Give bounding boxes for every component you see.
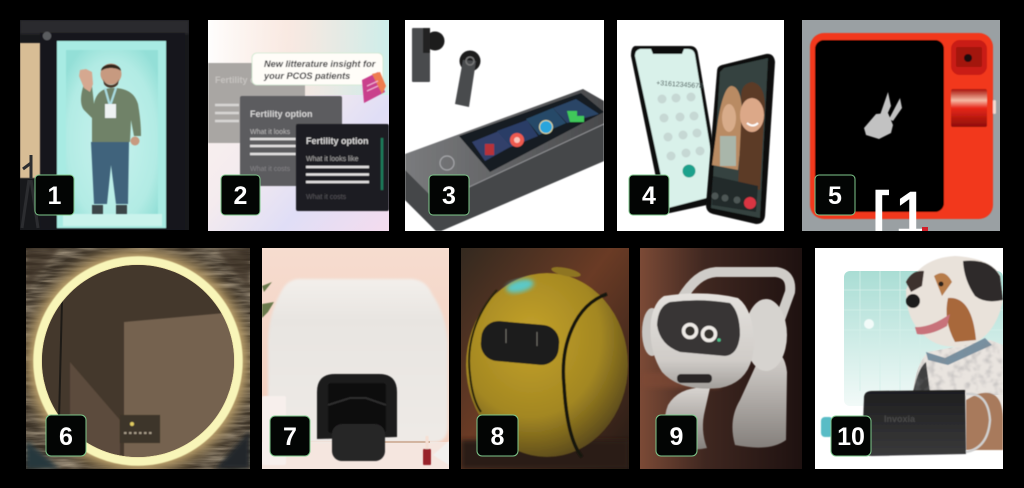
leaflet (433, 441, 449, 465)
middle card: Fertility option (250, 109, 312, 119)
red bottle (423, 436, 431, 465)
panel 2: fertility cards (208, 20, 389, 231)
bracket mark: 1 (895, 180, 928, 247)
panel 6: round lit mirror (26, 248, 250, 469)
collar case: Invoxia (884, 414, 916, 424)
mirror interior (40, 262, 240, 465)
nose (906, 294, 920, 308)
bracket mark: [ (872, 180, 889, 247)
plant (262, 282, 274, 318)
device opening (317, 374, 397, 461)
front card: Fertility option (306, 136, 368, 146)
panel 10: dog with smart collar (815, 248, 1003, 469)
badge 8 (477, 415, 518, 456)
charging case (405, 89, 604, 231)
badge 2: 2 (234, 182, 247, 210)
earbud right (455, 50, 480, 107)
white box left (262, 396, 286, 465)
badge 1 (35, 175, 74, 215)
badge 8: 8 (491, 423, 505, 451)
top knob (550, 265, 582, 279)
ball body (466, 265, 628, 457)
legs (665, 388, 710, 450)
callout: your PCOS patients (263, 71, 350, 81)
head (906, 256, 1003, 347)
panel 7: white device (262, 248, 449, 469)
fur speckle (913, 340, 1003, 396)
ears (963, 261, 1003, 301)
chest (913, 340, 1003, 450)
back card: Fertility o (215, 75, 256, 85)
front card: What it costs (306, 194, 347, 201)
badge 10 (831, 416, 871, 456)
handle (682, 272, 790, 325)
front card: What it looks like (306, 156, 359, 163)
badge 5: 5 (828, 182, 842, 210)
badge 6: 6 (59, 423, 73, 451)
badge 1: 1 (48, 182, 62, 210)
callout: New litterature insight for (264, 59, 376, 69)
collar case (821, 390, 990, 456)
rabbit logo (864, 92, 902, 139)
control panel (120, 415, 160, 443)
mirror glow (26, 248, 250, 469)
middle card (240, 96, 342, 186)
head (650, 293, 754, 389)
badge 9: 9 (670, 423, 683, 451)
face screen (657, 300, 740, 356)
badge 6 (46, 415, 86, 456)
mouth (915, 314, 950, 334)
badge 4 (629, 175, 669, 215)
middle card: What it costs (250, 166, 291, 173)
panel 5: orange AI device (802, 20, 1000, 247)
panel 3: earbuds and charging case (405, 20, 604, 231)
back card (208, 63, 305, 143)
face pill (479, 320, 561, 366)
phone left: keypad (631, 46, 722, 213)
badge 3: 3 (442, 182, 456, 210)
badge 5 (815, 175, 855, 215)
earbud left (412, 28, 444, 82)
panel 4: two phones (617, 20, 784, 231)
badge 9 (656, 415, 697, 456)
callout (252, 53, 383, 85)
scroll wheel (951, 89, 987, 127)
case screen (459, 93, 604, 172)
device body (268, 279, 448, 442)
badge 7: 7 (283, 423, 297, 451)
collar (926, 338, 992, 365)
badge 4: 4 (642, 182, 656, 210)
dog (906, 256, 1003, 450)
brown cheek (947, 298, 976, 342)
phone right: video call (706, 54, 775, 224)
video call faces (712, 86, 742, 170)
badge 3 (429, 175, 469, 215)
phone left: keypad: +31612345678 (656, 80, 703, 90)
icon: document stack (362, 72, 386, 103)
robot (642, 272, 790, 450)
side ear (745, 299, 787, 371)
tripod (22, 155, 38, 228)
panel 9: robot companion (640, 248, 802, 469)
bracket mark (875, 190, 922, 231)
middle card: What it looks (250, 129, 291, 136)
booth cabinet (40, 33, 185, 230)
mirror ring (38, 260, 238, 462)
tan wall (20, 43, 42, 178)
badge 2 (221, 175, 260, 215)
person standing (79, 64, 141, 214)
teal grid card (844, 271, 1003, 406)
red dot (922, 227, 928, 231)
badge 10: 10 (837, 423, 865, 451)
blue light (505, 277, 535, 295)
camera (951, 40, 987, 75)
booth logo (42, 32, 52, 40)
panel 1: hologram booth (20, 20, 189, 230)
badge 7 (270, 416, 310, 456)
panel 8: yellow ball robot (461, 248, 629, 469)
front card (296, 124, 389, 211)
orange body (810, 33, 996, 219)
snout camera (677, 374, 712, 383)
